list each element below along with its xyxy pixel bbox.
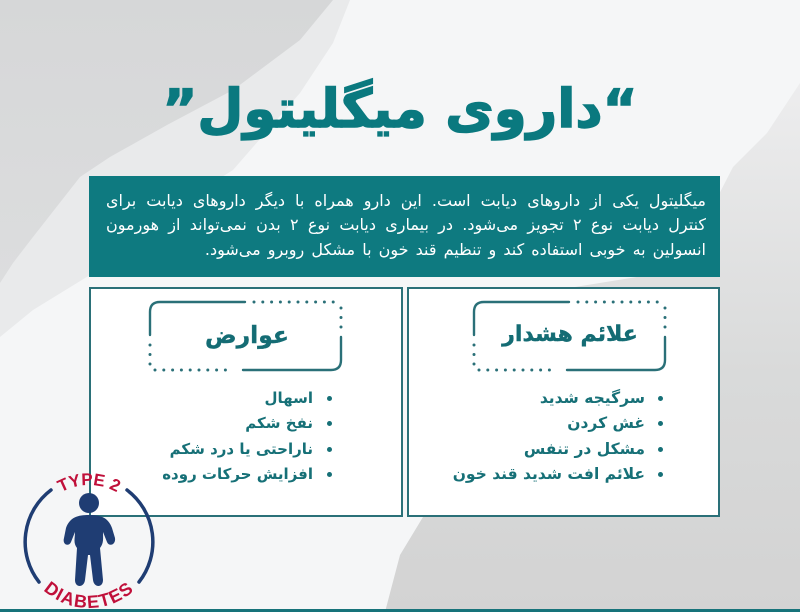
list: side effects: [162, 389, 332, 483]
list: side effects: نفخ شکم: [245, 414, 313, 432]
list: warning signs: غش کردن: [567, 414, 645, 432]
list: side effects: ناراحتی یا درد شکم: [170, 440, 313, 458]
title: “داروی میگلیتول”: [163, 79, 637, 140]
heading: side effects: [148, 300, 342, 372]
badge: type 2 diabetes: [23, 473, 155, 608]
list: warning signs: سرگیجه شدید: [540, 389, 645, 407]
icon: person: [64, 493, 115, 586]
intro panel: انسولین به خوبی استفاده کند و تنظیم قند خون با مشکل روبرو می‌شود.: [205, 240, 706, 259]
list: side effects: افزایش حرکات روده: [162, 465, 313, 483]
label: type 2: TYPE 2: [56, 473, 120, 492]
intro panel: [89, 176, 720, 277]
ring arcs: [25, 490, 153, 582]
label: diabetes: DIABETES: [44, 581, 132, 608]
intro panel: میگلیتول یکی از داروهای دیابت است. این دارو همراه با دیگر داروهای دیابت برای: [106, 191, 706, 210]
heading: warning signs: علائم هشدار: [502, 322, 638, 347]
list: warning signs: علائم افت شدید قند خون: [453, 465, 645, 483]
list: warning signs: مشکل در تنفس: [524, 440, 645, 458]
list: side effects: اسهال: [265, 389, 313, 407]
list: warning signs: [453, 388, 663, 483]
heading: warning signs: [472, 300, 666, 372]
intro panel: کنترل دیابت نوع ۲ تجویز می‌شود. در بیماری دیابت نوع ۲ بدن نمی‌تواند از هورمون: [106, 215, 706, 234]
heading: side effects: عوارض: [205, 321, 289, 349]
panel: warning signs: [407, 287, 720, 517]
panel: side effects: [89, 287, 403, 517]
